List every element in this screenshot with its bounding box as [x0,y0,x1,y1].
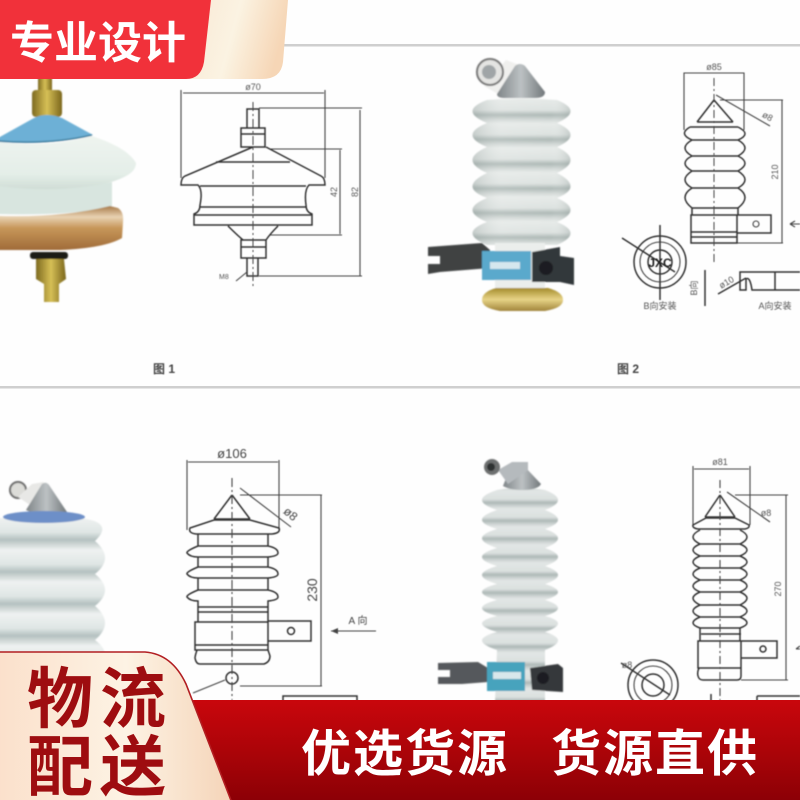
label: phi 85: ø85 [706,62,722,72]
heading: professional design: 专业设计 [10,19,186,68]
slogan: preferred sources: 优选货源 [301,726,509,782]
arrow: A view [796,646,800,649]
detail: A view bracket [711,694,800,702]
arrow: A view [790,221,800,227]
heading: logistics: 物流 [27,662,173,736]
arrow: A view [331,614,376,634]
label: phi 81: ø81 [712,457,728,467]
label: 42: 42 [329,187,339,197]
table rules [0,44,800,388]
label: phi 106: ø106 [217,446,247,461]
label: phi 8: ø8 [760,109,775,123]
caption: figure 2: 图 2 [617,362,639,376]
label: 82: 82 [350,187,360,197]
label: 270: 270 [773,581,783,597]
detail: B view disc [622,225,686,300]
label: A direction: A 向 [349,614,367,627]
label: B direction: B向 [688,280,699,296]
photo: polymer arrester with many sheds [438,459,563,702]
label: phi 8: ø8 [761,508,771,518]
drawing: figure 2 dimensions [622,62,800,311]
slogan: direct supply: 货源直供 [551,726,759,782]
drawing: figure 3 dimensions [187,446,376,704]
label: 230: 230 [304,578,320,602]
detail: A view bracket [688,270,800,306]
badge: professional design [0,0,288,79]
label: phi 8: ø8 [281,504,301,524]
caption: figure 1: 图 1 [153,362,175,376]
label: M8: M8 [219,274,229,281]
label: A view caption: A向安装 [758,300,792,311]
drawing: figure 1 dimensions [181,82,362,288]
photo: disc surge arrester [0,76,136,302]
photo: arrester cropped bottom left [0,482,105,670]
label: phi 10: ø10 [717,274,736,291]
photo: polymer arrester with six sheds [428,59,574,311]
band: red footer [190,700,800,800]
label: phi 70: ø70 [245,82,261,92]
label: JXC logo: JXC [648,256,672,270]
label: 210: 210 [770,164,780,180]
label: phi 8: ø8 [622,660,632,670]
label: B view caption: B向安装 [643,300,677,311]
drawing: figure 4 dimensions [621,457,800,710]
detail: B view disc [621,660,678,710]
badge: logistics [0,652,232,800]
